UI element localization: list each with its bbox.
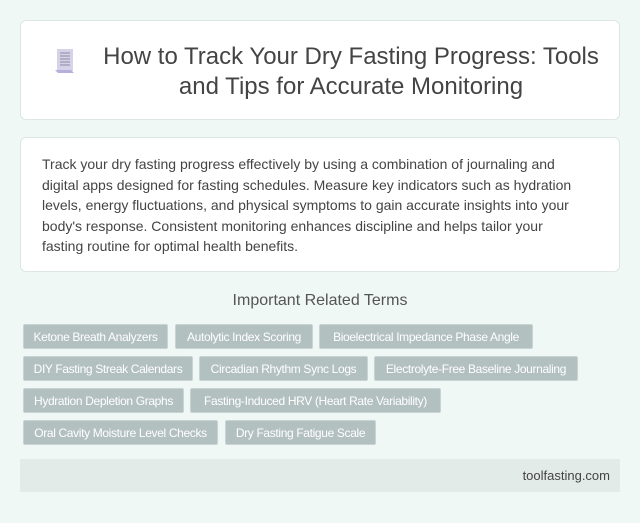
tags: Bioelectrical Impedance Phase Angle — [333, 330, 519, 344]
title: How to Track Your Dry Fasting Progress: Tools — [103, 43, 599, 70]
tags: DIY Fasting Streak Calendars — [34, 362, 182, 376]
tags: Electrolyte-Free Baseline Journaling — [386, 362, 566, 376]
tags: Fasting-Induced HRV (Heart Rate Variability) — [204, 394, 427, 408]
tags: Dry Fasting Fatigue Scale — [236, 426, 365, 440]
section heading: Important Related Terms — [233, 292, 407, 309]
description card — [20, 137, 620, 272]
title — [103, 43, 599, 100]
description text: Track your dry fasting progress effectively by using a combination of journaling and digital apps designed for fasting schedules. Measure key indicators such as hydration levels, energy fluctuations, and physical symptoms to gain accurate insights into your body's response. Consistent monitoring enhances discipline and helps tailor your fasting routine for optimal health benefits. — [42, 156, 571, 254]
tags: Circadian Rhythm Sync Logs — [211, 362, 356, 376]
footer — [20, 459, 620, 492]
tags: Oral Cavity Moisture Level Checks — [34, 426, 207, 440]
icon: document — [55, 49, 74, 73]
tags: Hydration Depletion Graphs — [34, 394, 173, 408]
tags: Autolytic Index Scoring — [187, 330, 301, 344]
header card — [20, 20, 620, 120]
tags: Ketone Breath Analyzers — [33, 330, 158, 344]
title: and Tips for Accurate Monitoring — [179, 73, 523, 100]
footer text: toolfasting.com — [523, 468, 610, 483]
